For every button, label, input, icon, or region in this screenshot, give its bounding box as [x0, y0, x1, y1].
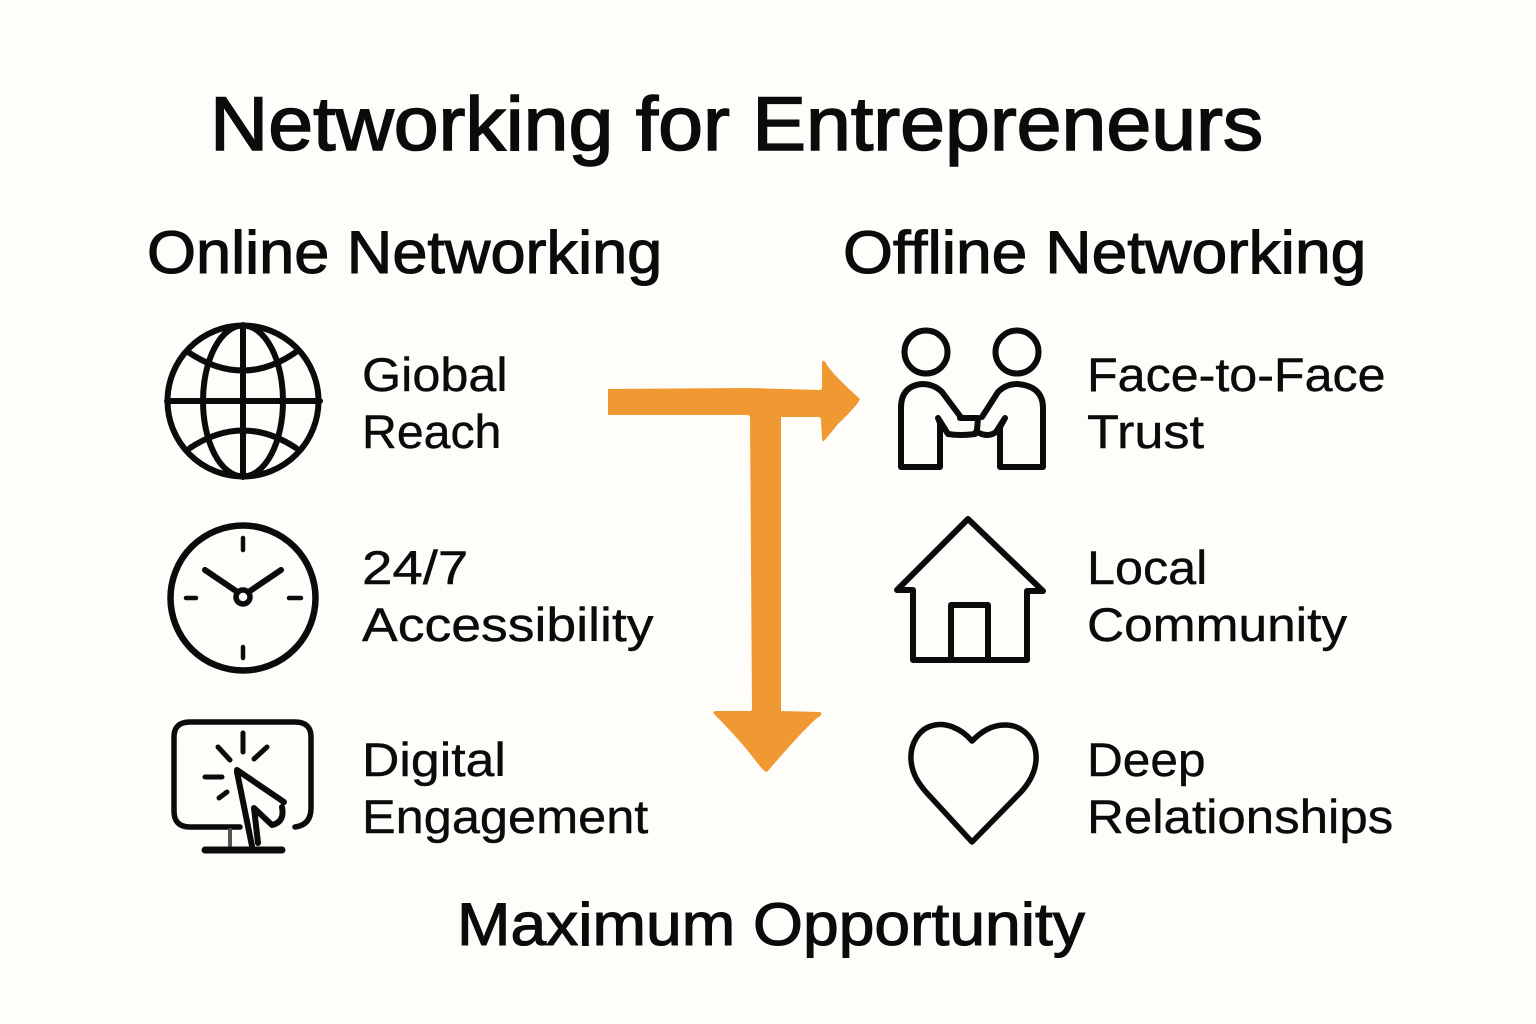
- title: Networking for Entrepreneurs: [210, 82, 1263, 167]
- text: global reach: [362, 349, 508, 459]
- icon: heart: [911, 725, 1036, 842]
- text: deep relationships: Relationships: [1087, 791, 1393, 844]
- text: local community: [1087, 542, 1348, 652]
- text: digital engagement: Digital: [362, 734, 506, 787]
- icon: globe: [167, 325, 320, 477]
- text: global reach: Giobal: [362, 349, 508, 402]
- text: face-to-face trust: [1087, 349, 1386, 459]
- text: digital engagement: [362, 734, 648, 844]
- arrow: orange branching arrow: [608, 361, 860, 772]
- heading: offline networking: Offline Networking: [843, 219, 1366, 286]
- icon: house: [897, 519, 1043, 660]
- text: global reach: Reach: [362, 406, 501, 459]
- text: local community: Local: [1087, 542, 1207, 595]
- heading: online networking: Online Networking: [147, 219, 662, 286]
- icon: clock: [170, 526, 316, 670]
- icon: handshake: [901, 330, 1043, 467]
- text: deep relationships: Deep: [1087, 734, 1206, 787]
- text: local community: Community: [1087, 599, 1347, 652]
- closing text: maximum opportunity: Maximum Opportunity: [457, 891, 1085, 958]
- text: 24/7 accessibility: [362, 542, 654, 652]
- text: 24/7 accessibility: 24/7: [362, 542, 468, 595]
- text: face-to-face trust: Face-to-Face: [1087, 349, 1386, 402]
- text: 24/7 accessibility: Accessibility: [362, 599, 654, 652]
- text: face-to-face trust: Trust: [1087, 406, 1204, 459]
- icon: monitor with cursor: [174, 722, 311, 850]
- text: deep relationships: [1087, 734, 1393, 844]
- text: digital engagement: Engagement: [362, 791, 648, 844]
